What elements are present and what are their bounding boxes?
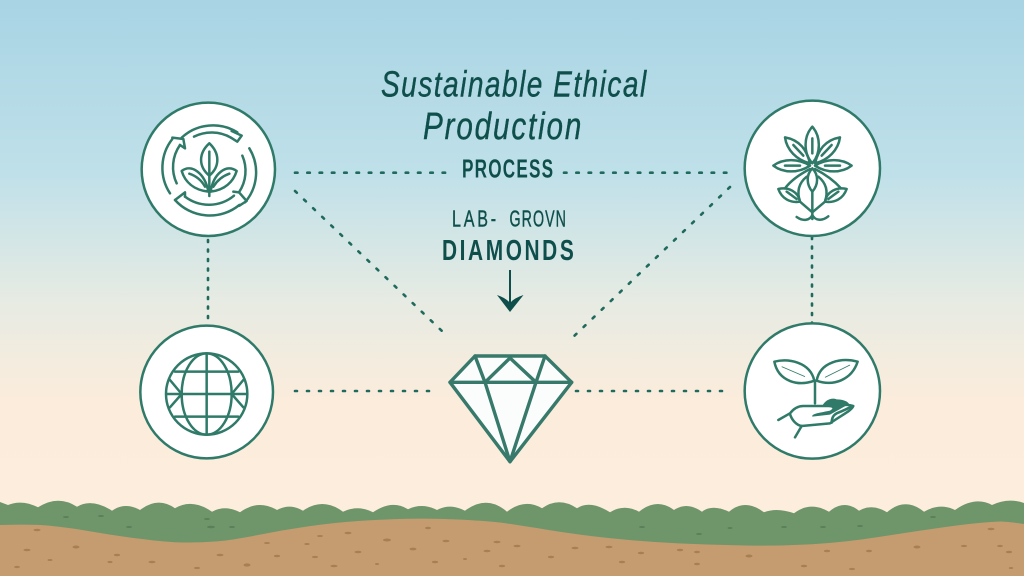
diamonds label: DIAMONDS (442, 235, 574, 267)
dotted connectors (208, 173, 812, 391)
icon: diamond (450, 356, 572, 462)
green hedge band (0, 501, 1024, 560)
hedge flecks (63, 515, 936, 535)
icon: flower circle (745, 101, 880, 236)
title: Production (423, 106, 581, 148)
icon: globe circle (140, 326, 273, 458)
icon: seedling in hand circle (745, 323, 880, 459)
lab-grown label: LAB- (452, 207, 496, 232)
icon: recycling leaf circle (142, 103, 275, 236)
lab-grown label (452, 207, 566, 233)
title (381, 64, 647, 148)
soil pebbles (14, 527, 1013, 570)
lab-grown label: GROVN (510, 207, 566, 233)
title: Sustainable Ethical (381, 64, 647, 104)
soil ground (0, 519, 1024, 576)
process label: PROCESS (462, 154, 553, 183)
arrow down to diamond (497, 270, 524, 312)
